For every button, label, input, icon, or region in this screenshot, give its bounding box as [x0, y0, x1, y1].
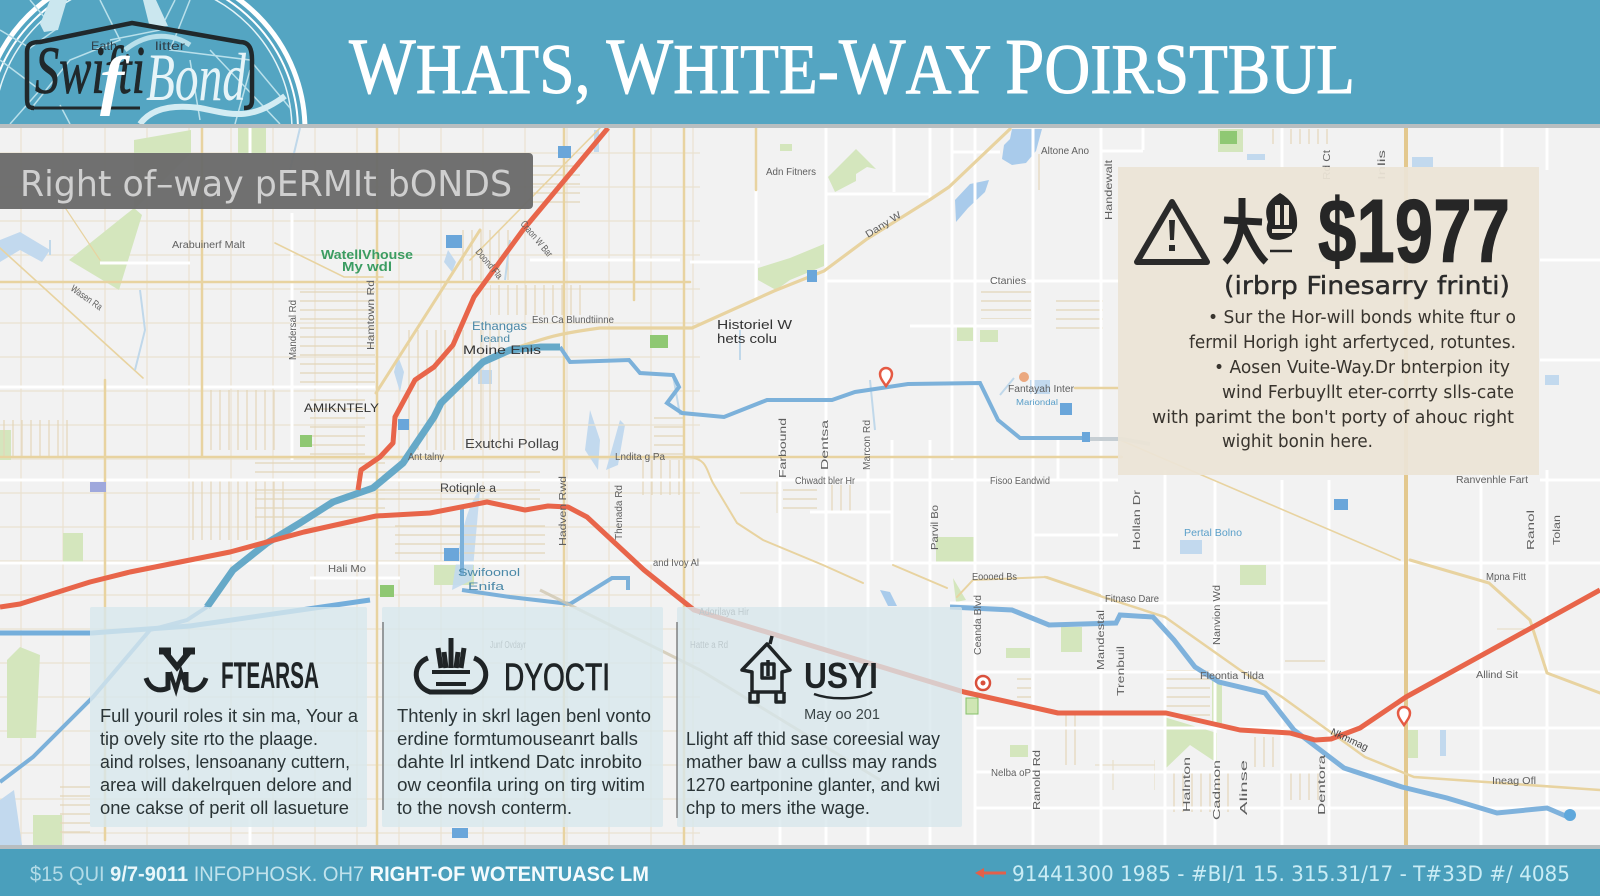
map vertical street labels	[288, 150, 1563, 820]
map place labels: Rotiqnle a	[440, 483, 497, 495]
body text: Full youril roles it sin ma, Your a	[100, 706, 359, 726]
map vertical street labels: Parvil Bo	[930, 505, 941, 550]
map place labels: Historiel W	[717, 318, 792, 332]
penalty subheading: (irbrp Finesarry frinti)	[1224, 271, 1510, 300]
map vertical street labels: Mandersal Rd	[288, 300, 299, 360]
map place labels	[68, 146, 1536, 787]
panel: step one	[90, 607, 367, 827]
map place labels: and Ivoy Al	[653, 558, 699, 569]
map place labels: Altone Ano	[1041, 146, 1089, 157]
icon: figure and flame	[1224, 193, 1297, 262]
map vertical street labels: Dentora	[1317, 754, 1328, 815]
logo text: litter	[155, 39, 185, 53]
penalty notes: • Aosen Vuite-Way.Dr bnterpion ity	[1214, 357, 1510, 378]
heading: FTEARSA	[221, 655, 319, 696]
map place labels: Nelba oP	[991, 768, 1031, 779]
map place labels: Nkmmag	[1329, 727, 1370, 754]
map place labels: Doond Fla	[473, 247, 504, 282]
map place labels: Junf Ovdayr	[490, 640, 526, 651]
map label: green place: My wdl	[342, 260, 392, 274]
river: side channels	[0, 507, 628, 782]
map place labels: Fisoo Eandwid	[990, 476, 1050, 487]
river: lower right	[950, 607, 1568, 817]
icon: warning triangle	[1137, 202, 1207, 262]
footer band	[0, 845, 1600, 896]
panel: step two	[382, 607, 663, 827]
map vertical street labels: Inlis	[1377, 150, 1388, 180]
residential street blocks	[0, 129, 1527, 840]
heading: DYOCTI	[504, 657, 610, 699]
red highway: north branch	[358, 128, 608, 490]
map vertical street labels: Mandestal	[1096, 610, 1107, 670]
map place labels: Arabuinerf Malt	[172, 240, 245, 251]
map place labels: Lndita g Pa	[615, 452, 665, 463]
logo text: Eath	[91, 39, 117, 53]
map pins	[880, 368, 1576, 821]
body text: tip ovely site rto the plaage.	[100, 729, 318, 749]
logo text: f	[100, 44, 131, 117]
body text: area will dakelrquen delore and	[100, 775, 352, 795]
map place labels: AMIKNTELY	[304, 403, 379, 415]
map place labels: Enifa	[468, 581, 505, 593]
map vertical street labels: Cadmon	[1212, 760, 1223, 820]
map vertical street labels: Alinse	[1239, 759, 1250, 815]
body text: Llight aff thid sase coreesial way	[686, 729, 940, 749]
icon: house	[742, 636, 790, 702]
heading: USYI	[804, 655, 878, 696]
map place labels: Ant talny	[408, 452, 444, 463]
map vertical street labels: Handewalt	[1104, 160, 1115, 220]
lakes and ponds	[0, 129, 1559, 845]
penalty notes: • Sur the Hor-will bonds white ftur o	[1208, 307, 1516, 328]
map vertical street labels: Marcon Rd	[862, 420, 873, 470]
map place labels: Mariondal	[1016, 398, 1058, 407]
body text: erdine formtumouseanrt balls	[397, 729, 638, 749]
map place labels: Adorilaya Hir	[699, 607, 750, 618]
body text	[100, 706, 359, 818]
logo text: Swifti	[35, 32, 145, 108]
map vertical street labels: Ranol	[1526, 510, 1537, 550]
logo text	[35, 32, 247, 117]
map vertical street labels: Hollan Dr	[1132, 489, 1143, 550]
map place labels: Mpna Fitt	[1486, 572, 1526, 583]
logo text: Bond	[146, 39, 247, 115]
body text: dahte lrl intkend Datc inrobito	[397, 752, 642, 772]
date: May oo 201	[804, 707, 880, 723]
map place labels: Swifoonol	[458, 567, 520, 579]
panel dividers	[383, 622, 677, 818]
body text: mather baw a cullss may rands	[686, 752, 937, 772]
map vertical street labels: Nanvion Wd	[1212, 585, 1223, 645]
heading underline	[814, 692, 872, 698]
body text	[397, 706, 651, 818]
title: WHATS, WHITE-WAY POIRSTBUL	[349, 24, 1355, 111]
body text: to the novsh conterm.	[397, 798, 572, 818]
subtitle banner: Right of–way pERMIt bONDS	[20, 164, 512, 205]
body text: Thtenly in skrl lagen benl vonto	[397, 706, 651, 726]
body text: 1270 eartponine glanter, and kwi	[686, 775, 940, 795]
map place labels: Esn Ca Blundtiinne	[532, 315, 614, 326]
map place labels: Ranvenhle Fart	[1456, 475, 1528, 486]
map vertical street labels: Ceanda Blvd	[973, 595, 984, 655]
map place labels: Hali Mo	[328, 564, 366, 575]
map vertical street labels: Dentsa	[820, 419, 831, 470]
penalty notes: fermil Horigh ight arfertyced, rotuntes.	[1189, 332, 1516, 353]
map place labels: Adn Fitners	[766, 167, 816, 178]
map place labels: hets colu	[717, 332, 777, 346]
body text: one cakse of perit oll lasueture	[100, 798, 349, 818]
panel: penalty callout	[1118, 167, 1539, 475]
map vertical street labels: Trenbuil	[1116, 646, 1127, 696]
map place labels: Exutchi Pollag	[465, 436, 559, 451]
body text: aind rolses, lensoanany cuttern,	[100, 752, 350, 772]
map place labels: Hatte a Rd	[690, 640, 728, 651]
map place labels: Dany W	[864, 210, 904, 241]
penalty notes	[1152, 307, 1516, 452]
map vertical street labels: Thenada Rd	[614, 485, 625, 540]
map place labels: Wasen Ra	[68, 283, 104, 313]
map place labels: Chwadt bler Hr	[795, 476, 856, 487]
map place labels: Fitnaso Dare	[1105, 594, 1159, 605]
map vertical street labels: Halnton	[1182, 757, 1193, 812]
road shields	[90, 131, 1348, 838]
penalty notes: wind Ferbuyllt eter-corrty slls-cate	[1222, 382, 1514, 403]
header band	[0, 0, 1600, 124]
map place labels: Ethangas	[472, 319, 527, 333]
map place labels: Ctanies	[990, 276, 1026, 287]
map vertical street labels: Hadven Rwd	[558, 476, 569, 546]
map place labels: Fleontia Tilda	[1200, 671, 1264, 682]
map place labels: Eoooed Bs	[972, 572, 1017, 583]
map vertical street labels: Ranold Rd	[1032, 750, 1043, 810]
road under panels	[540, 590, 880, 780]
thin blue waterways	[50, 128, 1014, 430]
map place labels: Craon W Bar	[518, 219, 555, 260]
footer left text: $15 QUI 9/7-9011 INFOPHOSK. OH7 RIGHT-OF WOTENTUASC LM	[30, 863, 649, 886]
body text: chp to mers ithe wage.	[686, 798, 870, 818]
map vertical street labels: Farbound	[778, 418, 789, 478]
map place labels: Ineag Ofl	[1492, 776, 1536, 787]
map vertical street labels: Tolan	[1552, 515, 1563, 545]
river: upper blue	[560, 347, 1082, 438]
icon: flame bowl	[416, 638, 486, 692]
red highway: east-west	[0, 502, 1600, 740]
map label: green place	[321, 248, 413, 274]
map place labels: Moine Enis	[463, 343, 541, 357]
header rule	[0, 124, 1600, 128]
footer right text: 91441300 1985 - #BI/1 15. 315.31/17 - T#33D #/ 4085	[1012, 862, 1570, 886]
map vertical street labels: Hamtown Rd	[366, 280, 377, 350]
logo: circular map emblem	[0, 0, 308, 124]
parks	[0, 128, 1418, 846]
panel: step three	[677, 607, 962, 827]
map place labels: Pertal Bolno	[1184, 527, 1242, 539]
icon: anchor mark	[146, 651, 206, 690]
map place labels: Allind Sit	[1476, 670, 1518, 681]
body text	[686, 729, 940, 818]
penalty amount: $1977	[1318, 182, 1510, 282]
map place labels: Ieand	[480, 334, 510, 345]
map place labels: Fantayah Inter	[1008, 384, 1075, 395]
icon: footer arrow	[975, 868, 1006, 878]
penalty notes: with parimt the bon't porty of ahouc right	[1152, 407, 1514, 428]
body text: ow ceonfila uring on tirg witim	[397, 775, 645, 795]
map label: green place: WatellVhouse	[321, 248, 413, 262]
map vertical street labels: Rd Ct	[1322, 150, 1333, 180]
penalty notes: wighit bonin here.	[1222, 431, 1373, 452]
